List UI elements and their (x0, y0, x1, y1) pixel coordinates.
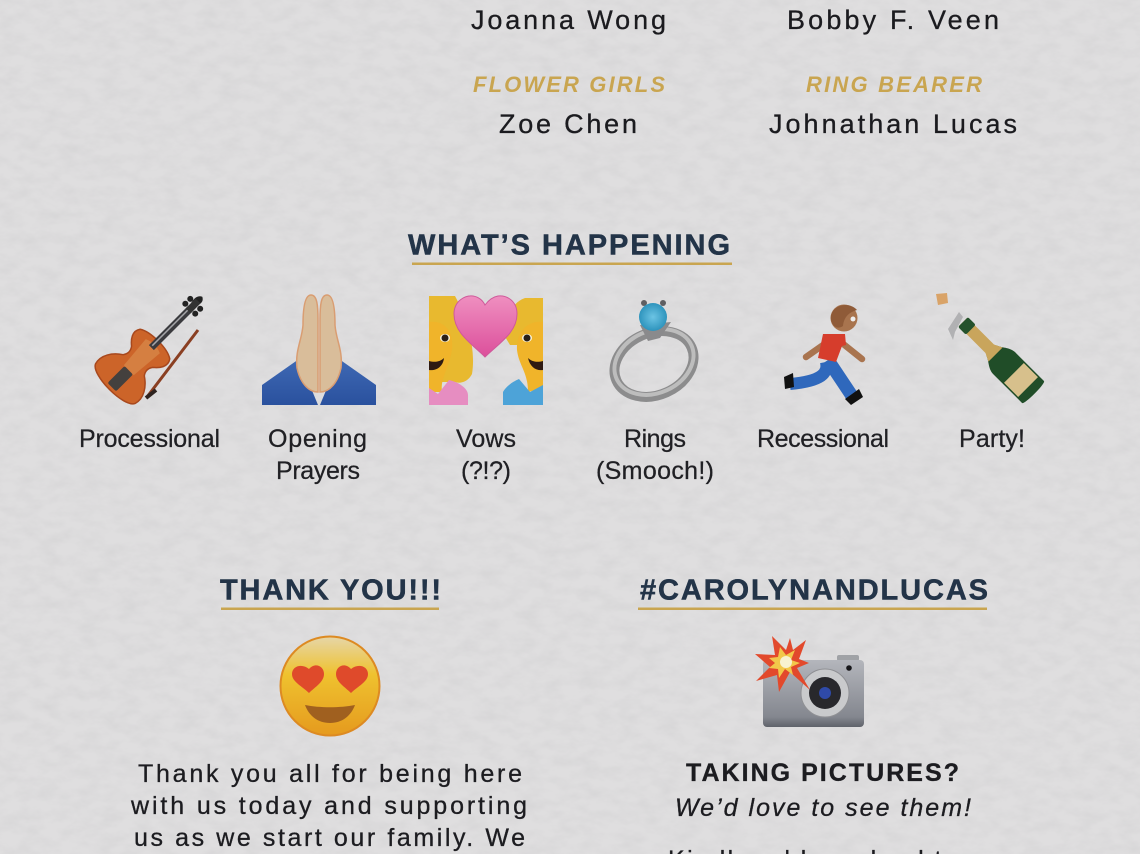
label: Vows (456, 425, 516, 485)
thank you paragraph: Thank you all for being here (138, 760, 522, 788)
icon: couple with heart (429, 296, 543, 405)
role: flower girls: FLOWER GIRLS (473, 72, 665, 97)
label: Vows: (?!?) (461, 457, 511, 485)
taking pictures text: We’d love to see them! (675, 794, 971, 822)
name: Bobby F. Veen: Bobby F. Veen (787, 5, 999, 35)
name: Joanna Wong: Joanna Wong (471, 5, 666, 35)
label: Vows: Vows (456, 425, 516, 453)
label: Opening Prayers: Prayers (276, 457, 360, 485)
role: ring bearer: RING BEARER (806, 72, 982, 97)
name: Zoe Chen: Zoe Chen (499, 109, 637, 139)
icon: praying hands (262, 295, 376, 405)
name: Johnathan Lucas: Johnathan Lucas (769, 109, 1017, 139)
taking pictures text (668, 759, 974, 854)
icon: camera with flash (755, 636, 864, 727)
icon: champagne bottle (936, 293, 1046, 405)
thank you paragraph: with us today and supporting (130, 792, 527, 820)
thank you paragraph (130, 760, 527, 852)
attendant names block (471, 5, 1017, 139)
label: Opening Prayers: Opening (268, 425, 367, 453)
icon: running man (784, 304, 863, 405)
thank you paragraph: us as we start our family. We (134, 824, 525, 852)
label: Processional: Processional (79, 425, 220, 453)
label: Opening Prayers (268, 425, 367, 485)
icon: diamond ring (604, 300, 704, 409)
label: Rings: (Smooch!) (596, 457, 714, 485)
label: Party: Party! (959, 425, 1025, 453)
label: Rings (596, 425, 714, 485)
heading: What's Happening: WHAT’S HAPPENING (408, 230, 730, 262)
label: Recessional: Recessional (757, 425, 889, 453)
heading: hashtag: #CAROLYNANDLUCAS (640, 574, 988, 606)
icon: heart eyes face (280, 636, 380, 736)
taking pictures text: TAKING PICTURES? (686, 759, 959, 787)
heading: Thank you: THANK YOU!!! (220, 574, 441, 606)
icon: violin and bow (89, 276, 223, 410)
label: Rings: Rings (624, 425, 686, 453)
